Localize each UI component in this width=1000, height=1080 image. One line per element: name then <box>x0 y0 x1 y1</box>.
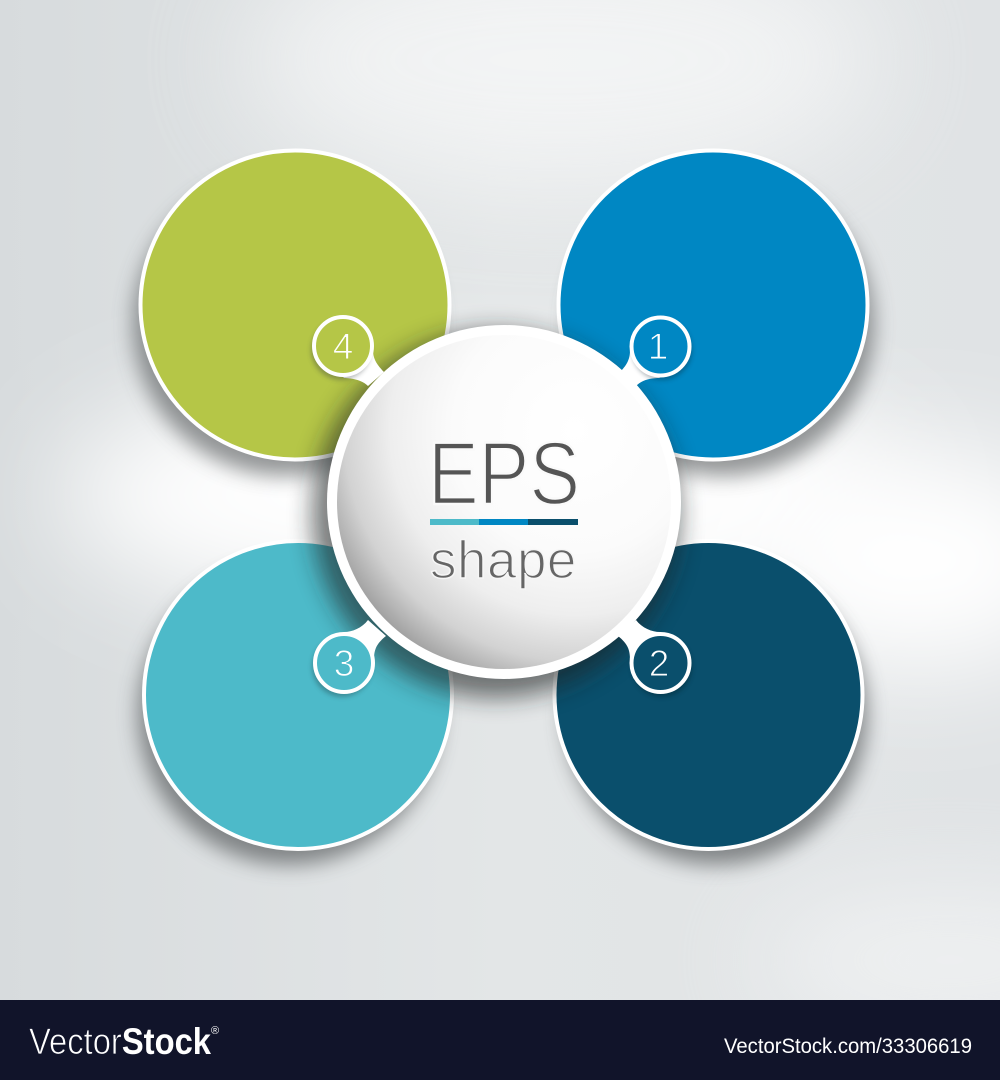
circle 3: teal <box>138 541 452 865</box>
central circle <box>327 325 681 679</box>
footer logo: VectorStock <box>29 1021 211 1062</box>
badge 1: 1 <box>648 326 668 367</box>
footer bar <box>0 1000 1000 1080</box>
badge 4 <box>311 317 384 386</box>
badge 4: 4 <box>333 326 353 367</box>
badge 2 <box>618 620 692 697</box>
heading: EPS: EPS <box>428 423 580 523</box>
badge 2: 2 <box>649 643 669 684</box>
footer url: VectorStock.com/33306619 <box>724 1035 972 1058</box>
circle 4: green <box>133 150 450 476</box>
badge 1 <box>620 318 692 386</box>
badge 3: 3 <box>334 643 354 684</box>
circle 2: navy <box>554 541 867 865</box>
registered mark: ® <box>211 1025 219 1037</box>
subheading: shape: shape <box>430 531 577 590</box>
tricolour underline <box>430 519 578 525</box>
central sphere shadow <box>312 330 680 698</box>
badge 3 <box>312 620 386 697</box>
circle 1: blue <box>558 150 874 476</box>
